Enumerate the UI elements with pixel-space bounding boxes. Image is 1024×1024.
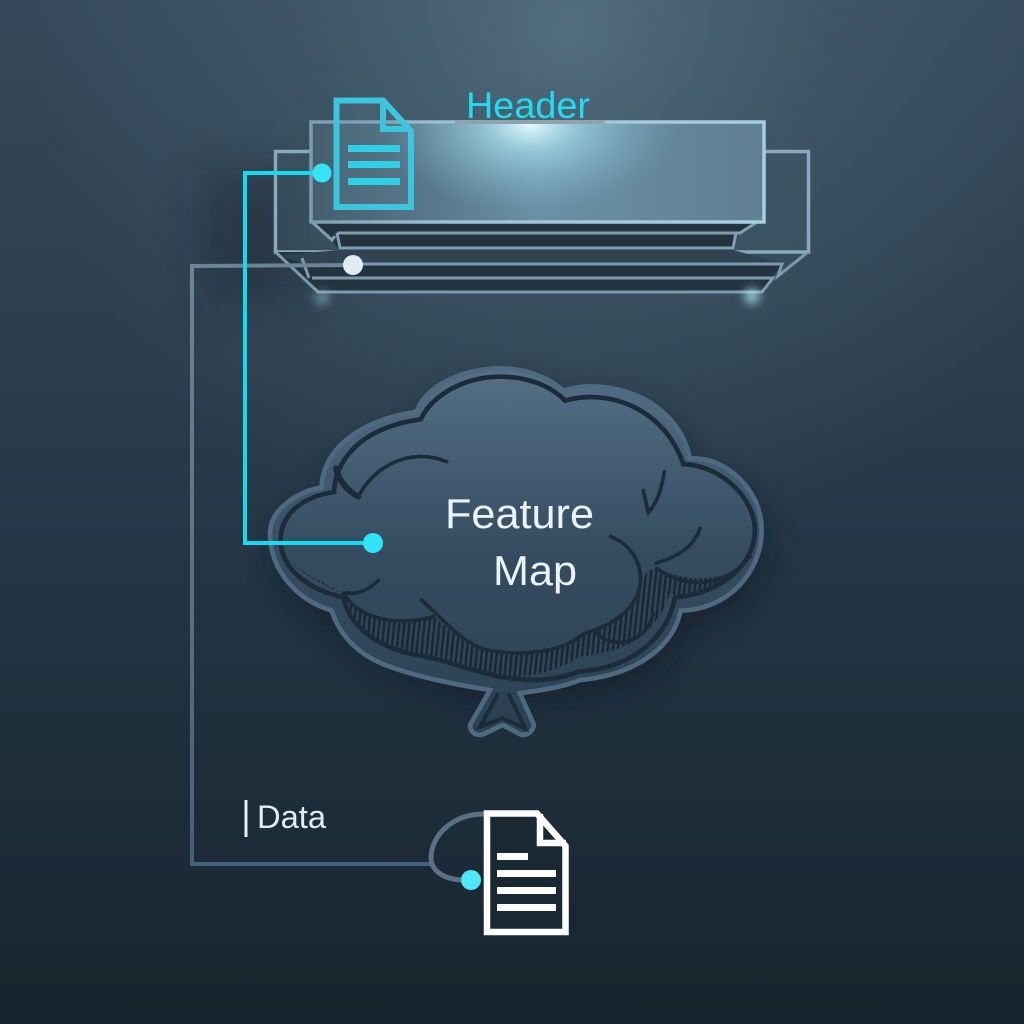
icon: white data document (487, 814, 566, 932)
icon: cyan document (336, 100, 411, 207)
back layer (276, 152, 808, 252)
label: Feature Map: Map (493, 547, 577, 594)
feature map cloud (270, 368, 762, 735)
node: cyan dot on header (312, 164, 332, 182)
panel glow (313, 124, 762, 220)
stacked dark slats (275, 222, 808, 292)
node: white dot on header (343, 255, 363, 275)
connector: grey line from panel to data document (192, 265, 432, 864)
front panel (311, 122, 764, 222)
node: cyan dot in cloud (363, 533, 383, 553)
header text backing line (455, 120, 605, 124)
panel: layered header block (275, 122, 808, 304)
label: Feature Map: Feature (445, 490, 594, 537)
hatched underside (282, 550, 750, 677)
node: cyan dot at data document (461, 870, 481, 890)
label: Data: Data (257, 799, 326, 835)
cloud body (270, 368, 762, 735)
heading: Header: Header (466, 85, 590, 126)
sketch strokes (336, 457, 750, 653)
cloud shadow (274, 382, 766, 704)
under-panel lights (316, 289, 759, 304)
inner contour (281, 377, 755, 680)
panel outline (311, 122, 764, 222)
tail detail (480, 693, 525, 728)
connector: arc to data document (431, 814, 484, 880)
connector: cyan line from panel to feature map (245, 173, 373, 543)
